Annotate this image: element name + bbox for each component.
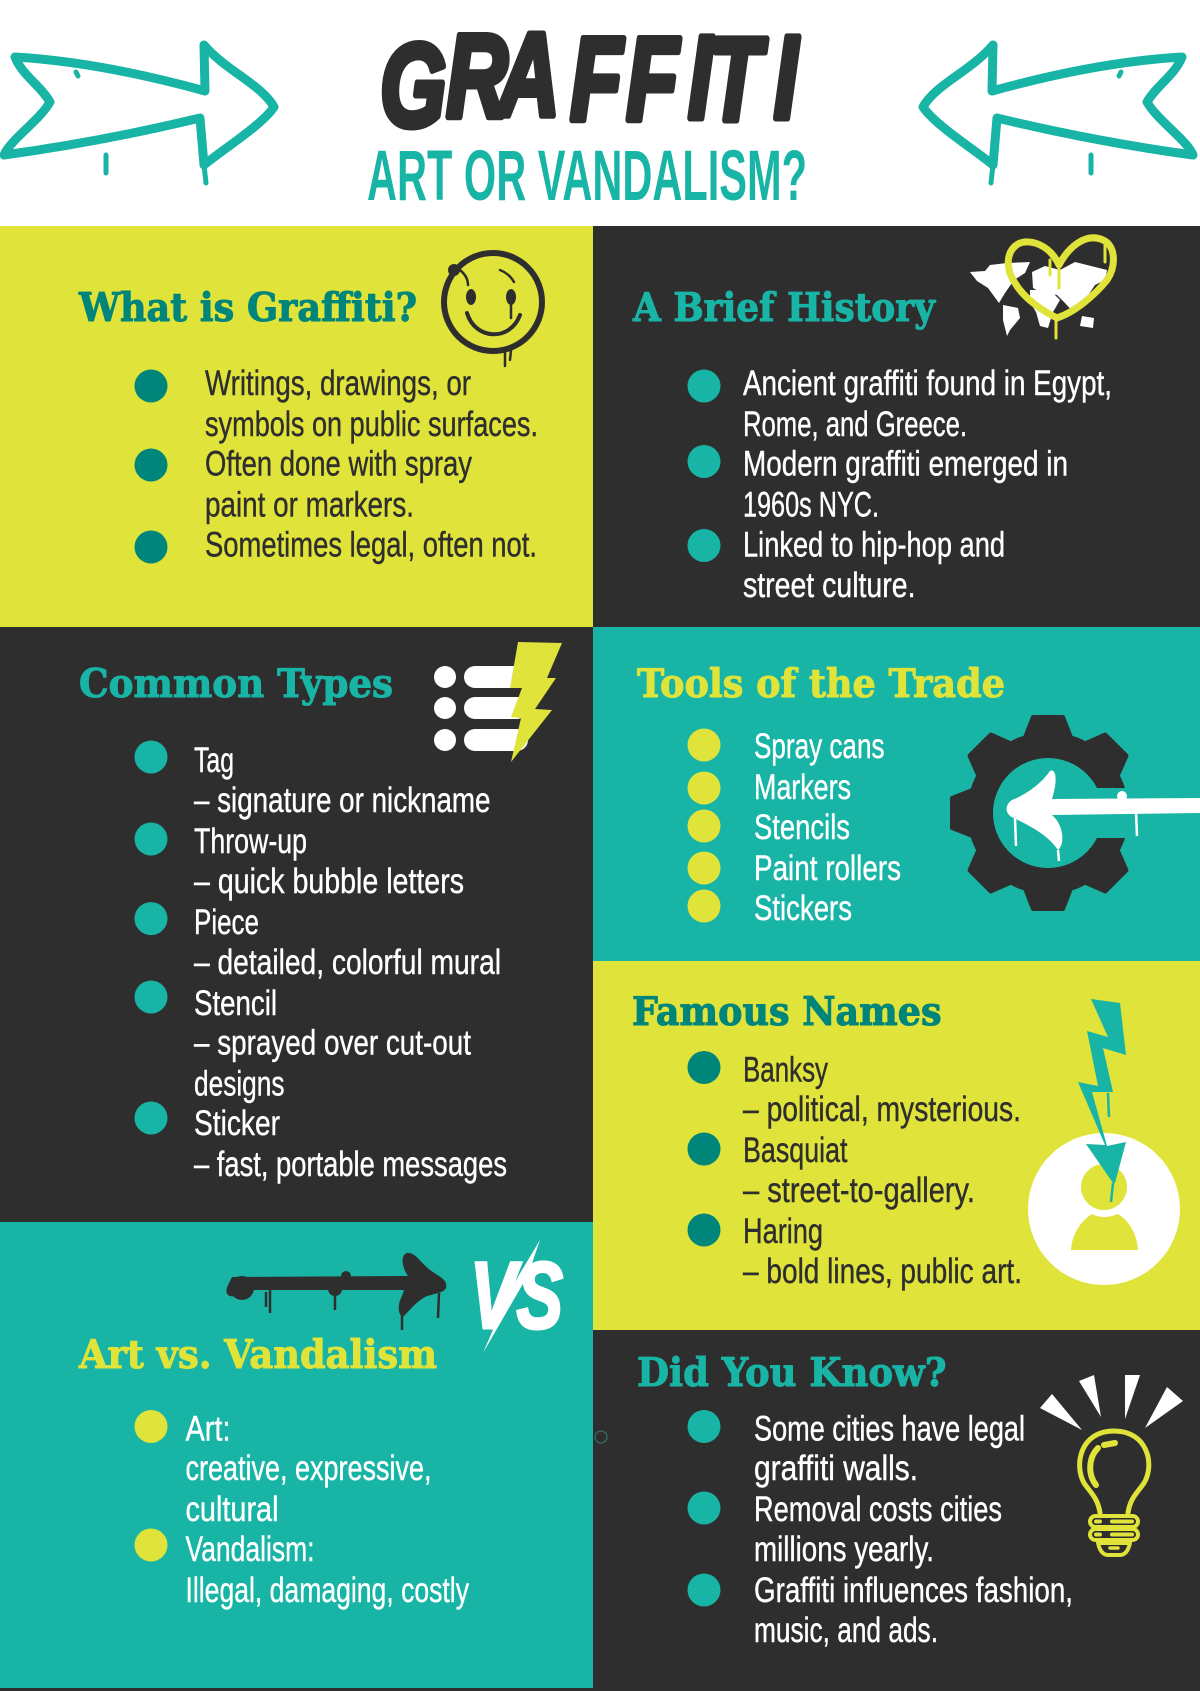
bullet list: a brief history: Linked to hip-hop and	[743, 526, 1005, 564]
bullet list: famous names: – political, mysterious.	[743, 1090, 1021, 1129]
bullet list: a brief history: 1960s NYC.	[743, 486, 879, 524]
panel: tools of the trade	[593, 627, 1200, 961]
bullet list: what is graffiti: Often done with spray	[205, 444, 472, 484]
bullet list: what is graffiti	[134, 364, 538, 564]
icon: list with lightning bolt	[434, 642, 562, 762]
bullet list: a brief history: street culture.	[743, 566, 916, 605]
bullet list: famous names: Haring	[743, 1212, 823, 1251]
icon: black spray arrow	[226, 1253, 446, 1330]
icon: VS: VS	[470, 1243, 563, 1349]
bullet list: common types: – fast, portable messages	[194, 1145, 507, 1184]
bullet list: did you know	[688, 1410, 1073, 1650]
subtitle: ART OR VANDALISM?	[367, 137, 807, 216]
icon: world map with heart	[970, 238, 1113, 338]
bullet list: common types: Piece	[194, 903, 259, 942]
bullet list: famous names	[688, 1050, 1022, 1291]
icon: VS	[470, 1240, 563, 1353]
bullet list: famous names: – street-to-gallery.	[743, 1171, 975, 1210]
icon: right spray arrow	[923, 45, 1193, 183]
bullet list: famous names: Banksy	[743, 1050, 828, 1090]
bullet list: tools: Stencils	[754, 808, 850, 847]
panel: common types	[0, 627, 593, 1222]
heading: art vs vandalism: Art vs. Vandalism	[78, 1332, 437, 1378]
bullet list: what is graffiti: paint or markers.	[205, 486, 414, 524]
heading: a brief history: A Brief History	[632, 285, 936, 331]
bullet list: common types: – quick bubble letters	[194, 862, 464, 901]
icon: light bulb	[1040, 1375, 1183, 1555]
panel: did you know	[593, 1330, 1200, 1691]
bullet list: did you know: Removal costs cities	[754, 1490, 1002, 1529]
bullet list: what is graffiti: Writings, drawings, or	[205, 364, 471, 403]
icon: gear with white arrow	[952, 717, 1200, 909]
icon: smiley	[444, 253, 542, 366]
icon: person with lightning bolt	[1028, 999, 1180, 1285]
bullet list: art vs vandalism	[134, 1410, 469, 1610]
bullet list: common types: – detailed, colorful mural	[194, 943, 501, 982]
panel: famous names	[593, 961, 1200, 1330]
bullet list: famous names: – bold lines, public art.	[743, 1252, 1022, 1291]
bullet list: a brief history: Modern graffiti emerged in	[743, 444, 1068, 484]
bullet list: did you know: millions yearly.	[754, 1530, 934, 1569]
bullet list: a brief history	[688, 364, 1112, 605]
bullet list: what is graffiti: Sometimes legal, often not.	[205, 526, 537, 564]
bullet list: tools: Stickers	[754, 889, 852, 928]
bullet list: art vs vandalism: Art:	[186, 1410, 230, 1448]
bullet list: common types: Sticker	[194, 1104, 280, 1143]
bullet list: common types: Stencil	[194, 984, 277, 1023]
bullet list: tools	[688, 727, 901, 928]
bullet list: did you know: Graffiti influences fashion,	[754, 1571, 1073, 1610]
panel: art vs vandalism	[0, 1222, 593, 1688]
title: GRAFFITI	[380, 8, 800, 151]
bullet list: a brief history: Rome, and Greece.	[743, 405, 967, 444]
bullet list: common types: – sprayed over cut-out	[194, 1024, 471, 1062]
panel: a brief history	[593, 226, 1200, 627]
bullet list: common types: designs	[194, 1064, 284, 1104]
heading: tools of the trade: Tools of the Trade	[637, 661, 1005, 707]
heading: did you know: Did You Know?	[637, 1350, 946, 1396]
bullet list: common types: – signature or nickname	[194, 781, 490, 820]
bullet list: what is graffiti: symbols on public surfaces.	[205, 405, 538, 444]
bullet list: art vs vandalism: Vandalism:	[186, 1530, 314, 1569]
bullet list: famous names: Basquiat	[743, 1131, 848, 1170]
panel: what is graffiti	[0, 226, 593, 627]
bullet list: art vs vandalism: creative, expressive,	[186, 1449, 432, 1488]
heading: famous names: Famous Names	[632, 989, 942, 1035]
bullet list: did you know: music, and ads.	[754, 1611, 938, 1650]
bullet list: art vs vandalism: cultural	[186, 1490, 278, 1529]
icon: left spray arrow	[4, 45, 274, 183]
bullet list: common types	[134, 740, 507, 1184]
bullet list: did you know: Some cities have legal	[754, 1410, 1025, 1448]
bullet list: tools: Paint rollers	[754, 849, 901, 888]
bullet list: tools: Spray cans	[754, 727, 884, 766]
bullet list: did you know: graffiti walls.	[754, 1449, 918, 1488]
heading: common types: Common Types	[79, 661, 393, 707]
heading: what is graffiti: What is Graffiti?	[78, 285, 417, 331]
bullet list: art vs vandalism: Illegal, damaging, costly	[186, 1571, 469, 1610]
bullet list: common types: Tag	[194, 741, 234, 780]
bullet list: a brief history: Ancient graffiti found in Egypt,	[743, 364, 1112, 403]
bullet list: common types: Throw-up	[194, 822, 307, 861]
bullet list: tools: Markers	[754, 768, 851, 807]
